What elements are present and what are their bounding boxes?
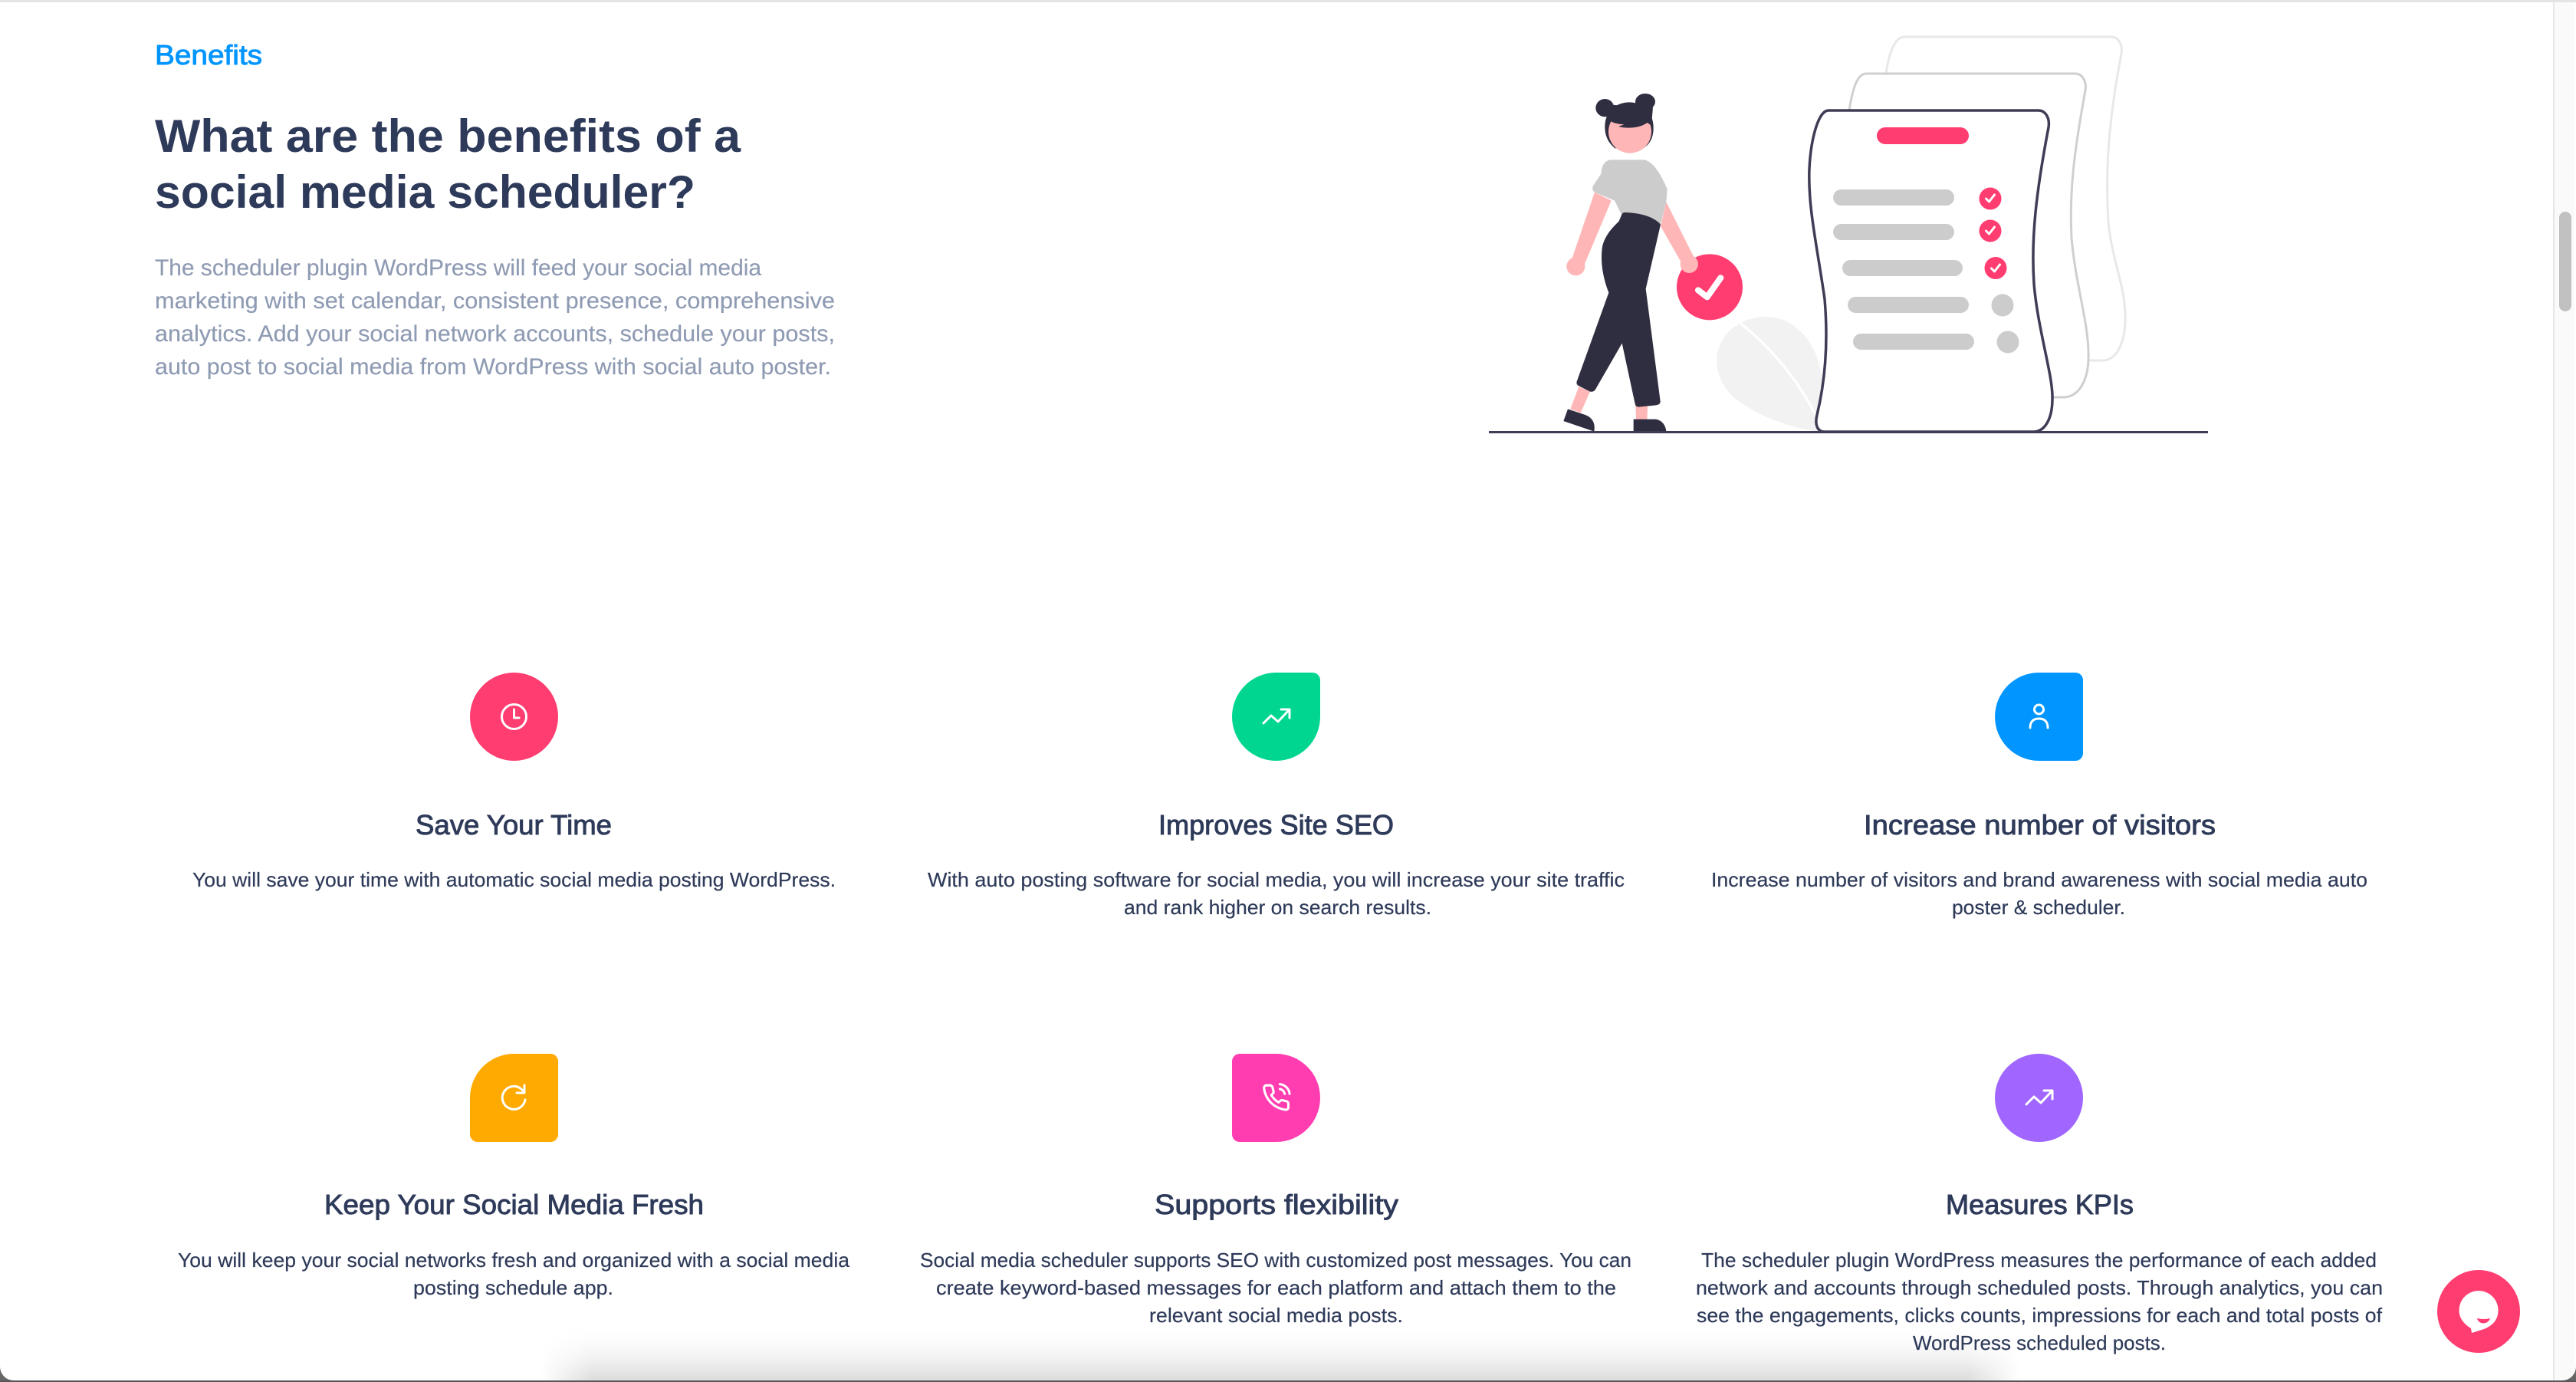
heading: Measures KPIs (1946, 1189, 2134, 1220)
icon: trending up (1995, 1054, 2083, 1142)
description: poster & scheduler. (1952, 896, 2125, 919)
card: Keep Your Social Media Fresh (178, 1054, 850, 1299)
description: network and accounts through scheduled posts. Through analytics, you can (1696, 1276, 2383, 1299)
heading: Keep Your Social Media Fresh (324, 1189, 704, 1220)
intro paragraph: analytics. Add your social network accounts, schedule your posts, (155, 321, 835, 347)
check badge (1677, 254, 1743, 320)
back page (1886, 37, 2125, 360)
description (1696, 1249, 2383, 1354)
description: The scheduler plugin WordPress measures the performance of each added (1701, 1249, 2377, 1272)
card: Supports flexibility (920, 1054, 1631, 1327)
leaf (1717, 317, 1823, 432)
illustration: woman beside checklist (1489, 37, 2208, 433)
card: Measures KPIs (1696, 1054, 2383, 1354)
description (920, 1249, 1631, 1327)
description (1711, 868, 2367, 919)
heading: Save Your Time (416, 809, 612, 841)
card: Save Your Time (192, 673, 836, 891)
title (155, 110, 741, 218)
card: Increase number of visitors (1711, 673, 2367, 919)
icon: clock (470, 673, 558, 761)
title: social media scheduler? (155, 166, 695, 218)
icon: phone call (1232, 1054, 1320, 1142)
heading: Improves Site SEO (1158, 809, 1394, 841)
card: Improves Site SEO (928, 673, 1625, 919)
description: posting schedule app. (413, 1276, 613, 1299)
eyebrow: Benefits: Benefits (155, 39, 262, 71)
description: You will save your time with automatic social media posting WordPress. (192, 868, 836, 891)
description: With auto posting software for social media, you will increase your site traffic (928, 868, 1625, 891)
ground line (1489, 431, 2208, 433)
woman figure (1563, 94, 1743, 432)
intro paragraph: The scheduler plugin WordPress will feed your social media (155, 255, 761, 281)
intro paragraph: marketing with set calendar, consistent presence, comprehensive (155, 288, 835, 314)
description: Increase number of visitors and brand awareness with social media auto (1711, 868, 2367, 891)
icon: person (1995, 673, 2083, 761)
icon: trending up (1232, 673, 1320, 761)
description: create keyword-based messages for each platform and attach them to the (936, 1276, 1616, 1299)
description (178, 1249, 850, 1299)
checklist header bar (1877, 127, 1969, 144)
heading: Supports flexibility (1155, 1189, 1398, 1220)
chat button (2437, 1270, 2520, 1353)
heading: Increase number of visitors (1864, 809, 2216, 841)
browser scrollbar (2553, 2, 2574, 1380)
middle page (1849, 74, 2088, 397)
description: relevant social media posts. (1149, 1304, 1403, 1327)
title: What are the benefits of a (155, 110, 741, 162)
description: Social media scheduler supports SEO with customized post messages. You can (920, 1249, 1631, 1272)
description: and rank higher on search results. (1124, 896, 1431, 919)
description: You will keep your social networks fresh and organized with a social media (178, 1249, 850, 1272)
description: WordPress scheduled posts. (1913, 1331, 2166, 1354)
intro paragraph (155, 255, 835, 380)
description: see the engagements, clicks counts, impressions for each and total posts of (1697, 1304, 2383, 1327)
intro paragraph: auto post to social media from WordPress with social auto poster. (155, 354, 831, 380)
front page (1809, 110, 2052, 432)
icon: refresh (470, 1054, 558, 1142)
description (928, 868, 1625, 919)
checklist rows (1833, 187, 2019, 353)
heading block (155, 39, 835, 380)
